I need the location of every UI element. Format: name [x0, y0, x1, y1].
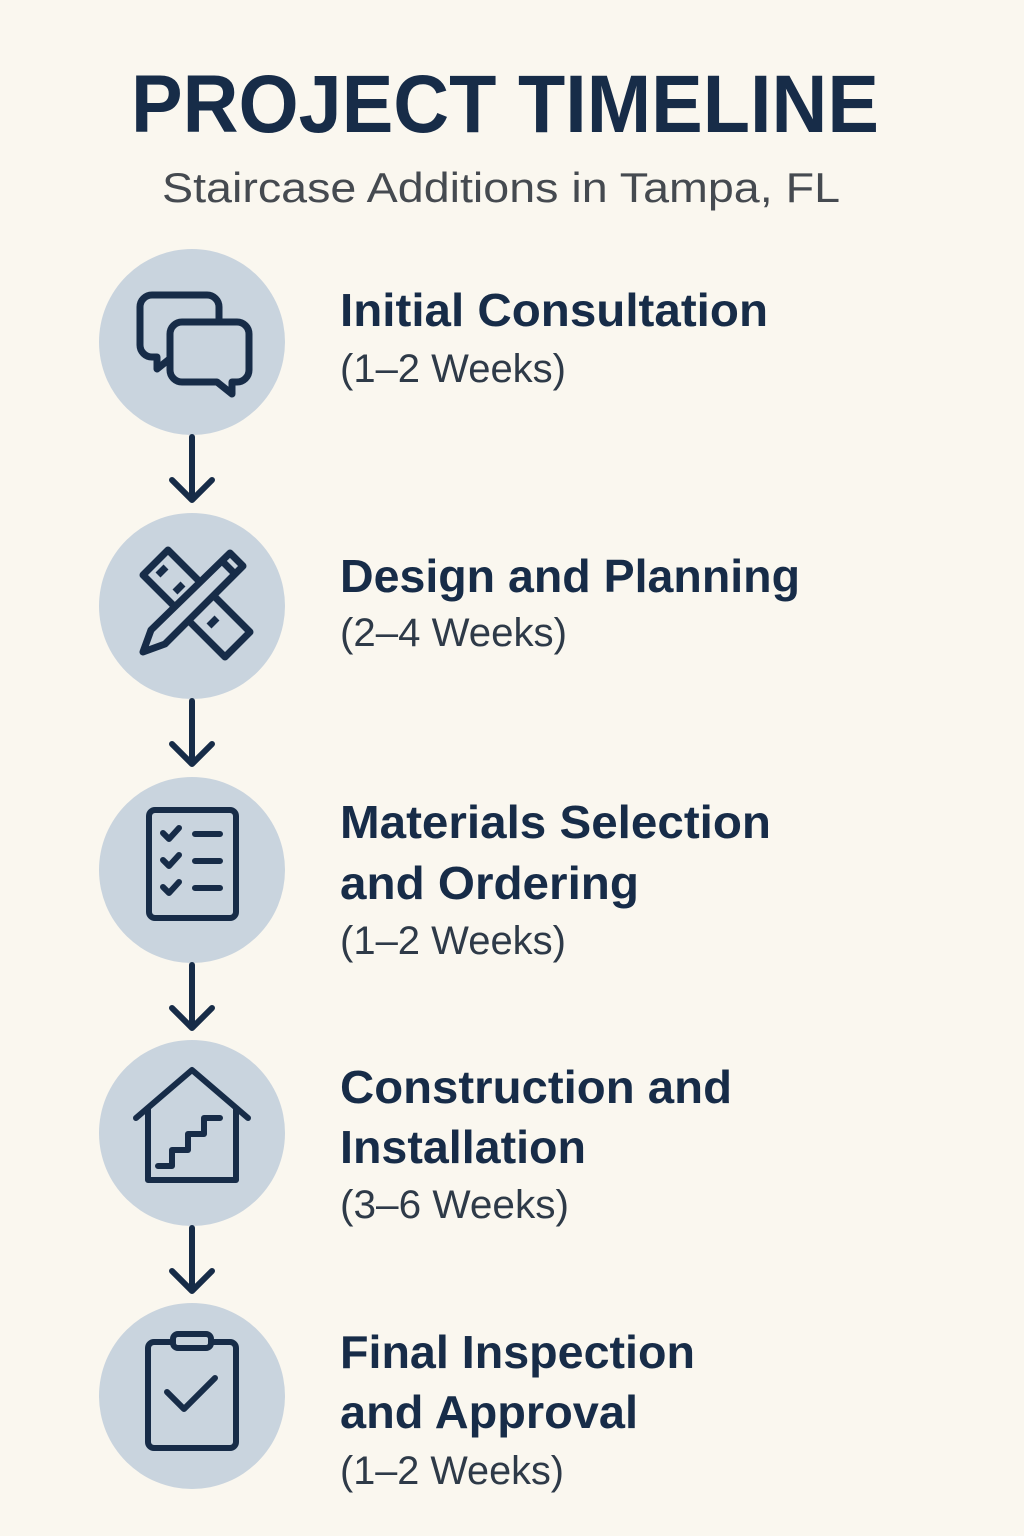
- icon: house with stairs: [99, 1040, 285, 1226]
- text: step 3: [340, 796, 771, 963]
- arrow 3: [172, 965, 212, 1028]
- icon: checklist: [99, 777, 285, 963]
- arrow 2: [172, 701, 212, 764]
- arrow 1: [172, 437, 212, 500]
- step 3: materials selection: [99, 777, 771, 963]
- subtitle: Staircase Additions in Tampa, FL: [162, 164, 840, 211]
- text: step 5: [340, 1326, 695, 1493]
- text: step 3: (1–2 Weeks): [340, 919, 566, 963]
- text: step 2: (2–4 Weeks): [340, 611, 567, 655]
- text: step 4: (3–6 Weeks): [340, 1183, 569, 1227]
- text: step 3: Materials Selection: [340, 796, 771, 848]
- arrow 4: [172, 1228, 212, 1291]
- text: step 1: [340, 284, 768, 391]
- text: step 4: Construction and: [340, 1061, 732, 1113]
- text: step 5: (1–2 Weeks): [340, 1449, 564, 1493]
- icon: ruler and pencil: [99, 513, 285, 699]
- text: step 5: and Approval: [340, 1386, 638, 1438]
- step 2: design and planning: [99, 513, 800, 699]
- text: step 2: Design and Planning: [340, 550, 800, 602]
- text: step 2: [340, 550, 800, 655]
- text: step 4: Installation: [340, 1121, 586, 1173]
- text: step 4: [340, 1061, 732, 1227]
- title: PROJECT TIMELINE: [131, 59, 879, 150]
- step 5: final inspection: [99, 1303, 695, 1493]
- text: step 1: Initial Consultation: [340, 284, 768, 336]
- text: step 5: Final Inspection: [340, 1326, 695, 1378]
- step 4: construction: [99, 1040, 732, 1227]
- text: step 1: (1–2 Weeks): [340, 347, 566, 391]
- step 1: initial consultation: [99, 249, 768, 435]
- text: step 3: and Ordering: [340, 857, 639, 909]
- icon: chat bubbles: [99, 249, 285, 435]
- icon: clipboard check: [99, 1303, 285, 1489]
